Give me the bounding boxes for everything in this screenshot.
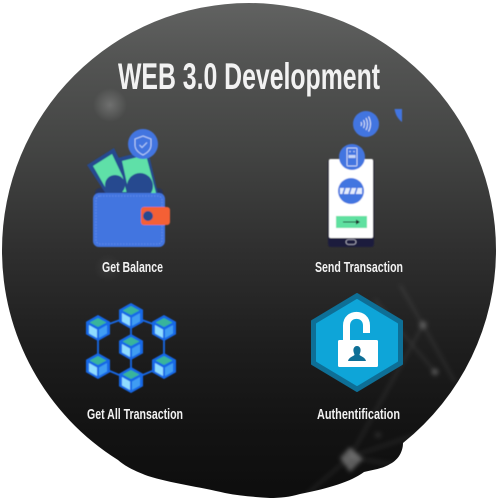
user silhouette [348,346,366,361]
label: Get Balance: Get Balance [102,259,163,276]
icon: blockchain network [86,304,176,392]
wallet back edge [95,188,163,198]
card reader badge [339,144,365,170]
small blue fragment [394,109,402,122]
label: Get All Transaction: Get All Transaction [87,406,183,423]
padlock body [338,340,378,367]
icon: padlock hexagon [312,294,402,391]
title: WEB 3.0 Development [118,56,380,97]
padlock shackle [346,315,366,340]
home button [346,240,356,244]
icon: back banknote [87,148,136,195]
icon: shield badge [128,129,158,159]
icon: wallet with banknotes [87,129,170,247]
icon: smartphone [328,109,402,247]
label: Send Transaction: Send Transaction [315,259,403,276]
phone base [328,159,374,247]
label: Authentification: Authentification [317,406,400,423]
send button with arrow [336,216,367,228]
icon: front banknote [118,150,158,199]
payment badge [338,178,364,204]
icon: wallet clasp [141,207,170,225]
icon: wallet body [93,193,165,247]
contactless badge [353,111,379,137]
phone screen [329,159,373,238]
